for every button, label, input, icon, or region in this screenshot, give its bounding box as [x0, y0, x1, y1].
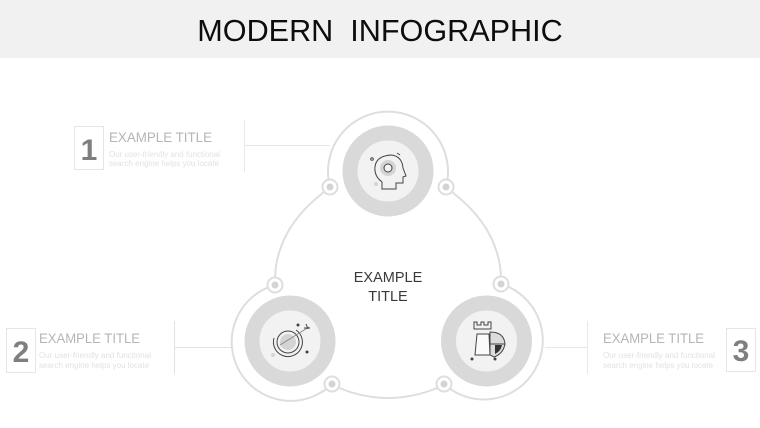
center label: TITLE: [368, 289, 408, 305]
description 1: Our user-friendly and functional: [109, 150, 220, 159]
outer arcs: [232, 112, 543, 401]
number box 1: 1: [81, 134, 97, 167]
description 2: Our user-friendly and functional: [39, 351, 151, 360]
number box 2: 2: [13, 336, 29, 369]
number box 3: 3: [733, 335, 749, 368]
ring: bottom right: [448, 303, 524, 379]
icon: head with gear: [371, 153, 406, 189]
description 3: search engine helps you locate: [603, 361, 714, 370]
leader line 2: [174, 321, 231, 374]
header band: [0, 0, 760, 58]
number box 3: [726, 328, 756, 372]
icon: target with arrow: [271, 324, 310, 357]
ring: bottom left: [252, 303, 328, 379]
connector nodes: [268, 180, 508, 392]
ring: top: [350, 133, 426, 209]
title: MODERN INFOGRAPHIC: [197, 14, 563, 48]
center label: EXAMPLE: [354, 270, 423, 286]
description 2: search engine helps you locate: [39, 361, 150, 370]
panel: item 3: [545, 321, 756, 374]
description 1: search engine helps you locate: [109, 159, 220, 168]
heading 1: EXAMPLE TITLE: [109, 129, 212, 145]
panel: item 2: [6, 321, 231, 374]
heading 2: EXAMPLE TITLE: [39, 330, 140, 346]
center label: [354, 270, 423, 305]
leader line 3: [545, 321, 588, 374]
connector curves: [275, 192, 501, 398]
description 3: Our user-friendly and functional: [603, 351, 715, 360]
number box 1: [74, 126, 104, 170]
leader line 1: [244, 120, 330, 172]
icon: chess rook and shield: [471, 322, 505, 360]
central cycle diagram: [232, 112, 543, 401]
heading 3: EXAMPLE TITLE: [603, 330, 704, 346]
number box 2: [6, 328, 36, 372]
panel: item 1: [74, 120, 330, 172]
